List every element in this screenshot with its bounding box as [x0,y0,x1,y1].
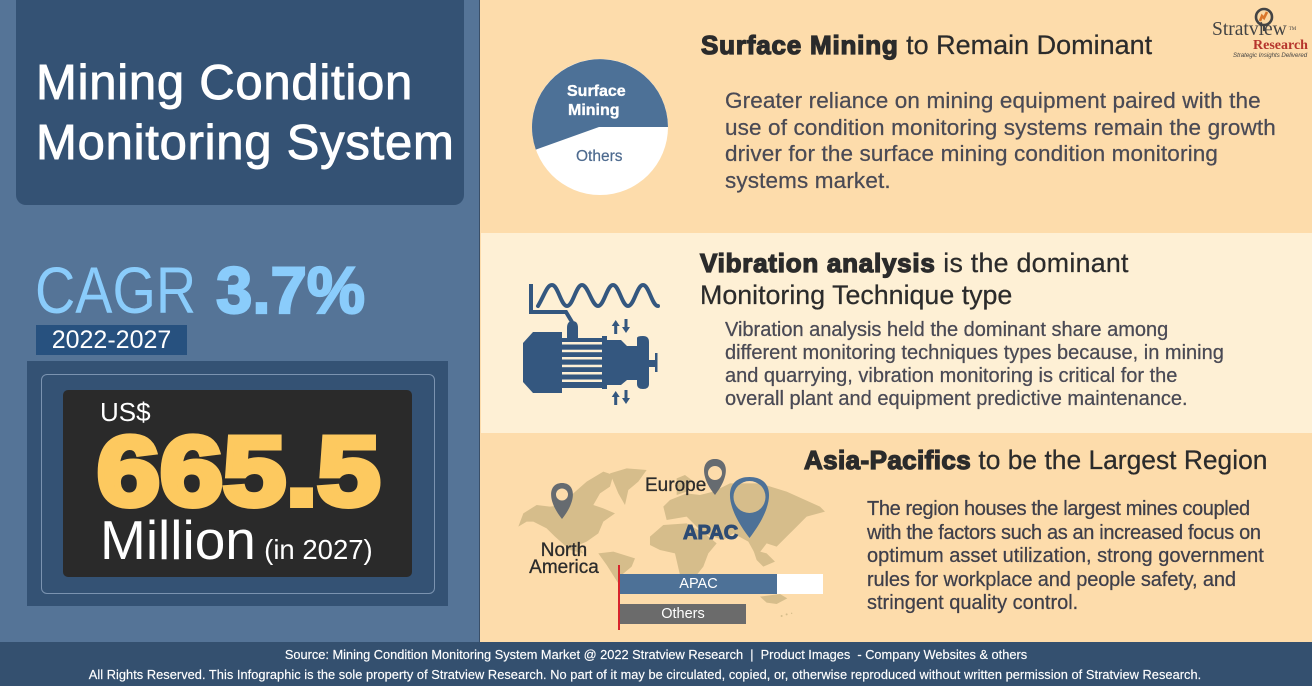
heading: Asia-Pacific: Asia-Pacifics to be the Largest Region [804,445,1267,475]
logo: Stratview Research: Research [1253,38,1308,53]
bar: others [620,604,746,624]
bar: APAC: APAC [679,576,718,592]
world map [518,459,825,617]
icon: APAC pin [730,477,769,538]
text: Asia-Pacific: optimum asset utilization, strong government [867,545,1264,567]
logo: Stratview Research: Stratview TM [1212,19,1296,40]
bar: APAC [620,574,777,594]
label: Europe: Europe [645,475,706,496]
decorative thin outline [41,374,435,594]
text: Asia-Pacific [866,498,1264,614]
CAGR heading [35,253,365,327]
text: surface mining: systems market. [725,168,891,192]
heading: vibration analysis: Monitoring Technique type [700,280,1012,310]
bar chart: APAC vs others [618,565,823,630]
text: Asia-Pacific: rules for workplace and people safety, and [867,568,1236,590]
source line: Source: Mining Condition Monitoring System Market @ 2022 Stratview Research | Product Images - Company Websites & others [285,647,1027,662]
panel: title box [16,0,464,205]
map continents [518,468,825,617]
text: Asia-Pacific: stringent quality control. [867,592,1078,614]
text: surface mining: Greater reliance on mining equipment paired with the [725,88,1261,113]
text: vibration analysis: different monitoring techniques types because, in mining [725,342,1224,364]
label: North America: North [541,540,587,561]
text: vibration analysis: and quarrying, vibration monitoring is critical for the [725,365,1177,387]
text: vibration analysis: overall plant and equipment predictive maintenance. [725,388,1188,410]
CAGR word: CAGR [35,253,196,327]
icon: north america pin [551,483,573,519]
title [36,56,455,170]
text: vibration analysis: Vibration analysis held the dominant share among [725,319,1168,341]
heading: vibration analysis: Vibration analysis is the dominant [700,248,1129,278]
text: surface mining: driver for the surface mining condition monitoring [725,141,1218,166]
pie chart: surface mining share: Mining [568,102,620,119]
title: Monitoring System [36,116,455,170]
heading: vibration analysis [699,248,1129,310]
CAGR value: 3.7% [216,253,365,327]
text: Asia-Pacific: with the factors such as an increased focus on [867,522,1261,544]
text: surface mining: use of condition monitoring systems remain the growth [725,114,1276,140]
rights line: All Rights Reserved. This Infographic is the sole property of Stratview Research. No part of it may be circulated, copied, or, otherwise reproduced without written permission of Stratview Research. [89,667,1201,682]
million label: Million (in 2027) [100,509,373,571]
pie chart: surface mining share [532,59,668,195]
icon: vibrating motor [523,283,660,405]
pie chart: surface mining share: Others [576,148,623,165]
logo: Stratview Research: Strategic Insights Delivered [1233,52,1307,59]
logo: Stratview Research [1212,8,1308,59]
bar: total [620,574,823,594]
label: North America: America [529,557,599,578]
label: North America [529,540,599,578]
panel: vibration analysis [481,233,1312,433]
label: APAC: APAC [683,522,738,544]
title: Mining Condition [36,56,413,110]
market value card [63,390,412,577]
text: Asia-Pacific: The region houses the largest mines coupled [867,498,1250,520]
US$ label: US$ [100,397,151,427]
market value number: 665.5 [97,416,380,526]
footer [0,642,1312,686]
heading: surface mining: Surface Mining to Remain Dominant [701,30,1152,60]
panel: market value frame [27,361,448,606]
icon: europe pin [704,459,726,495]
pie chart: surface mining share: Surface [567,83,626,100]
panel: left sidebar [0,0,480,642]
icon: logo target [1254,8,1274,31]
text: surface mining [725,88,1276,193]
text: vibration analysis [725,319,1224,410]
bar: others: Others [661,606,705,622]
period badge: 2022-2027 [52,326,171,354]
axis line [618,565,620,630]
